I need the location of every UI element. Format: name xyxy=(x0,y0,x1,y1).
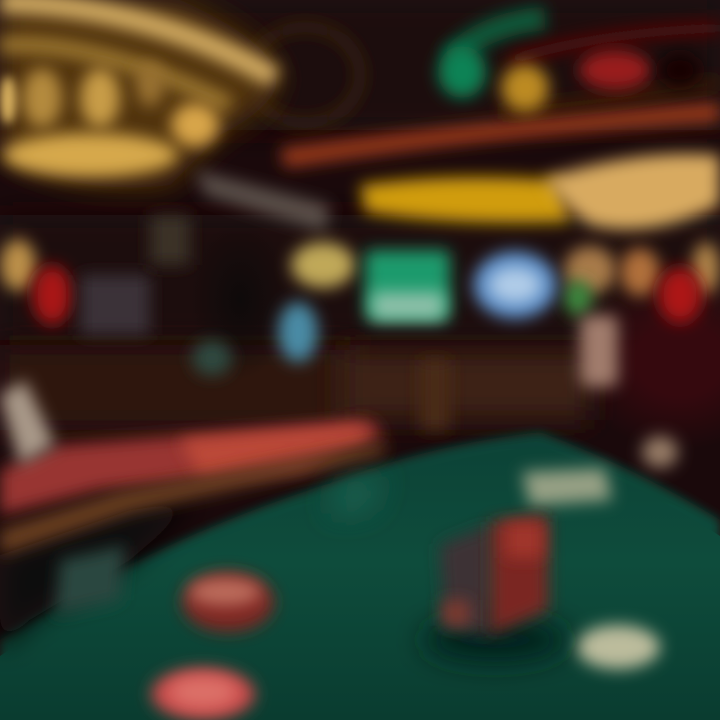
chandelier xyxy=(0,0,360,188)
small chip at right edge xyxy=(642,436,678,468)
chip stack xyxy=(423,515,567,662)
grey beam below chandelier xyxy=(195,170,330,232)
red chip: centre xyxy=(182,572,274,632)
orange ceiling band xyxy=(280,102,720,168)
playing card: upper felt xyxy=(522,468,612,506)
playing card: lower right xyxy=(576,625,660,669)
faint card on left felt xyxy=(55,545,125,615)
faint glow on felt xyxy=(330,475,385,515)
wall lamp and side lights xyxy=(0,215,720,387)
yellow ceiling band xyxy=(360,154,720,230)
glowing screens xyxy=(192,250,557,376)
red chip: bottom xyxy=(151,668,255,720)
upper right ceiling lights xyxy=(438,18,720,112)
red table at left xyxy=(0,380,390,555)
dark shadow at left of table xyxy=(0,500,200,650)
green felt table xyxy=(0,432,720,720)
